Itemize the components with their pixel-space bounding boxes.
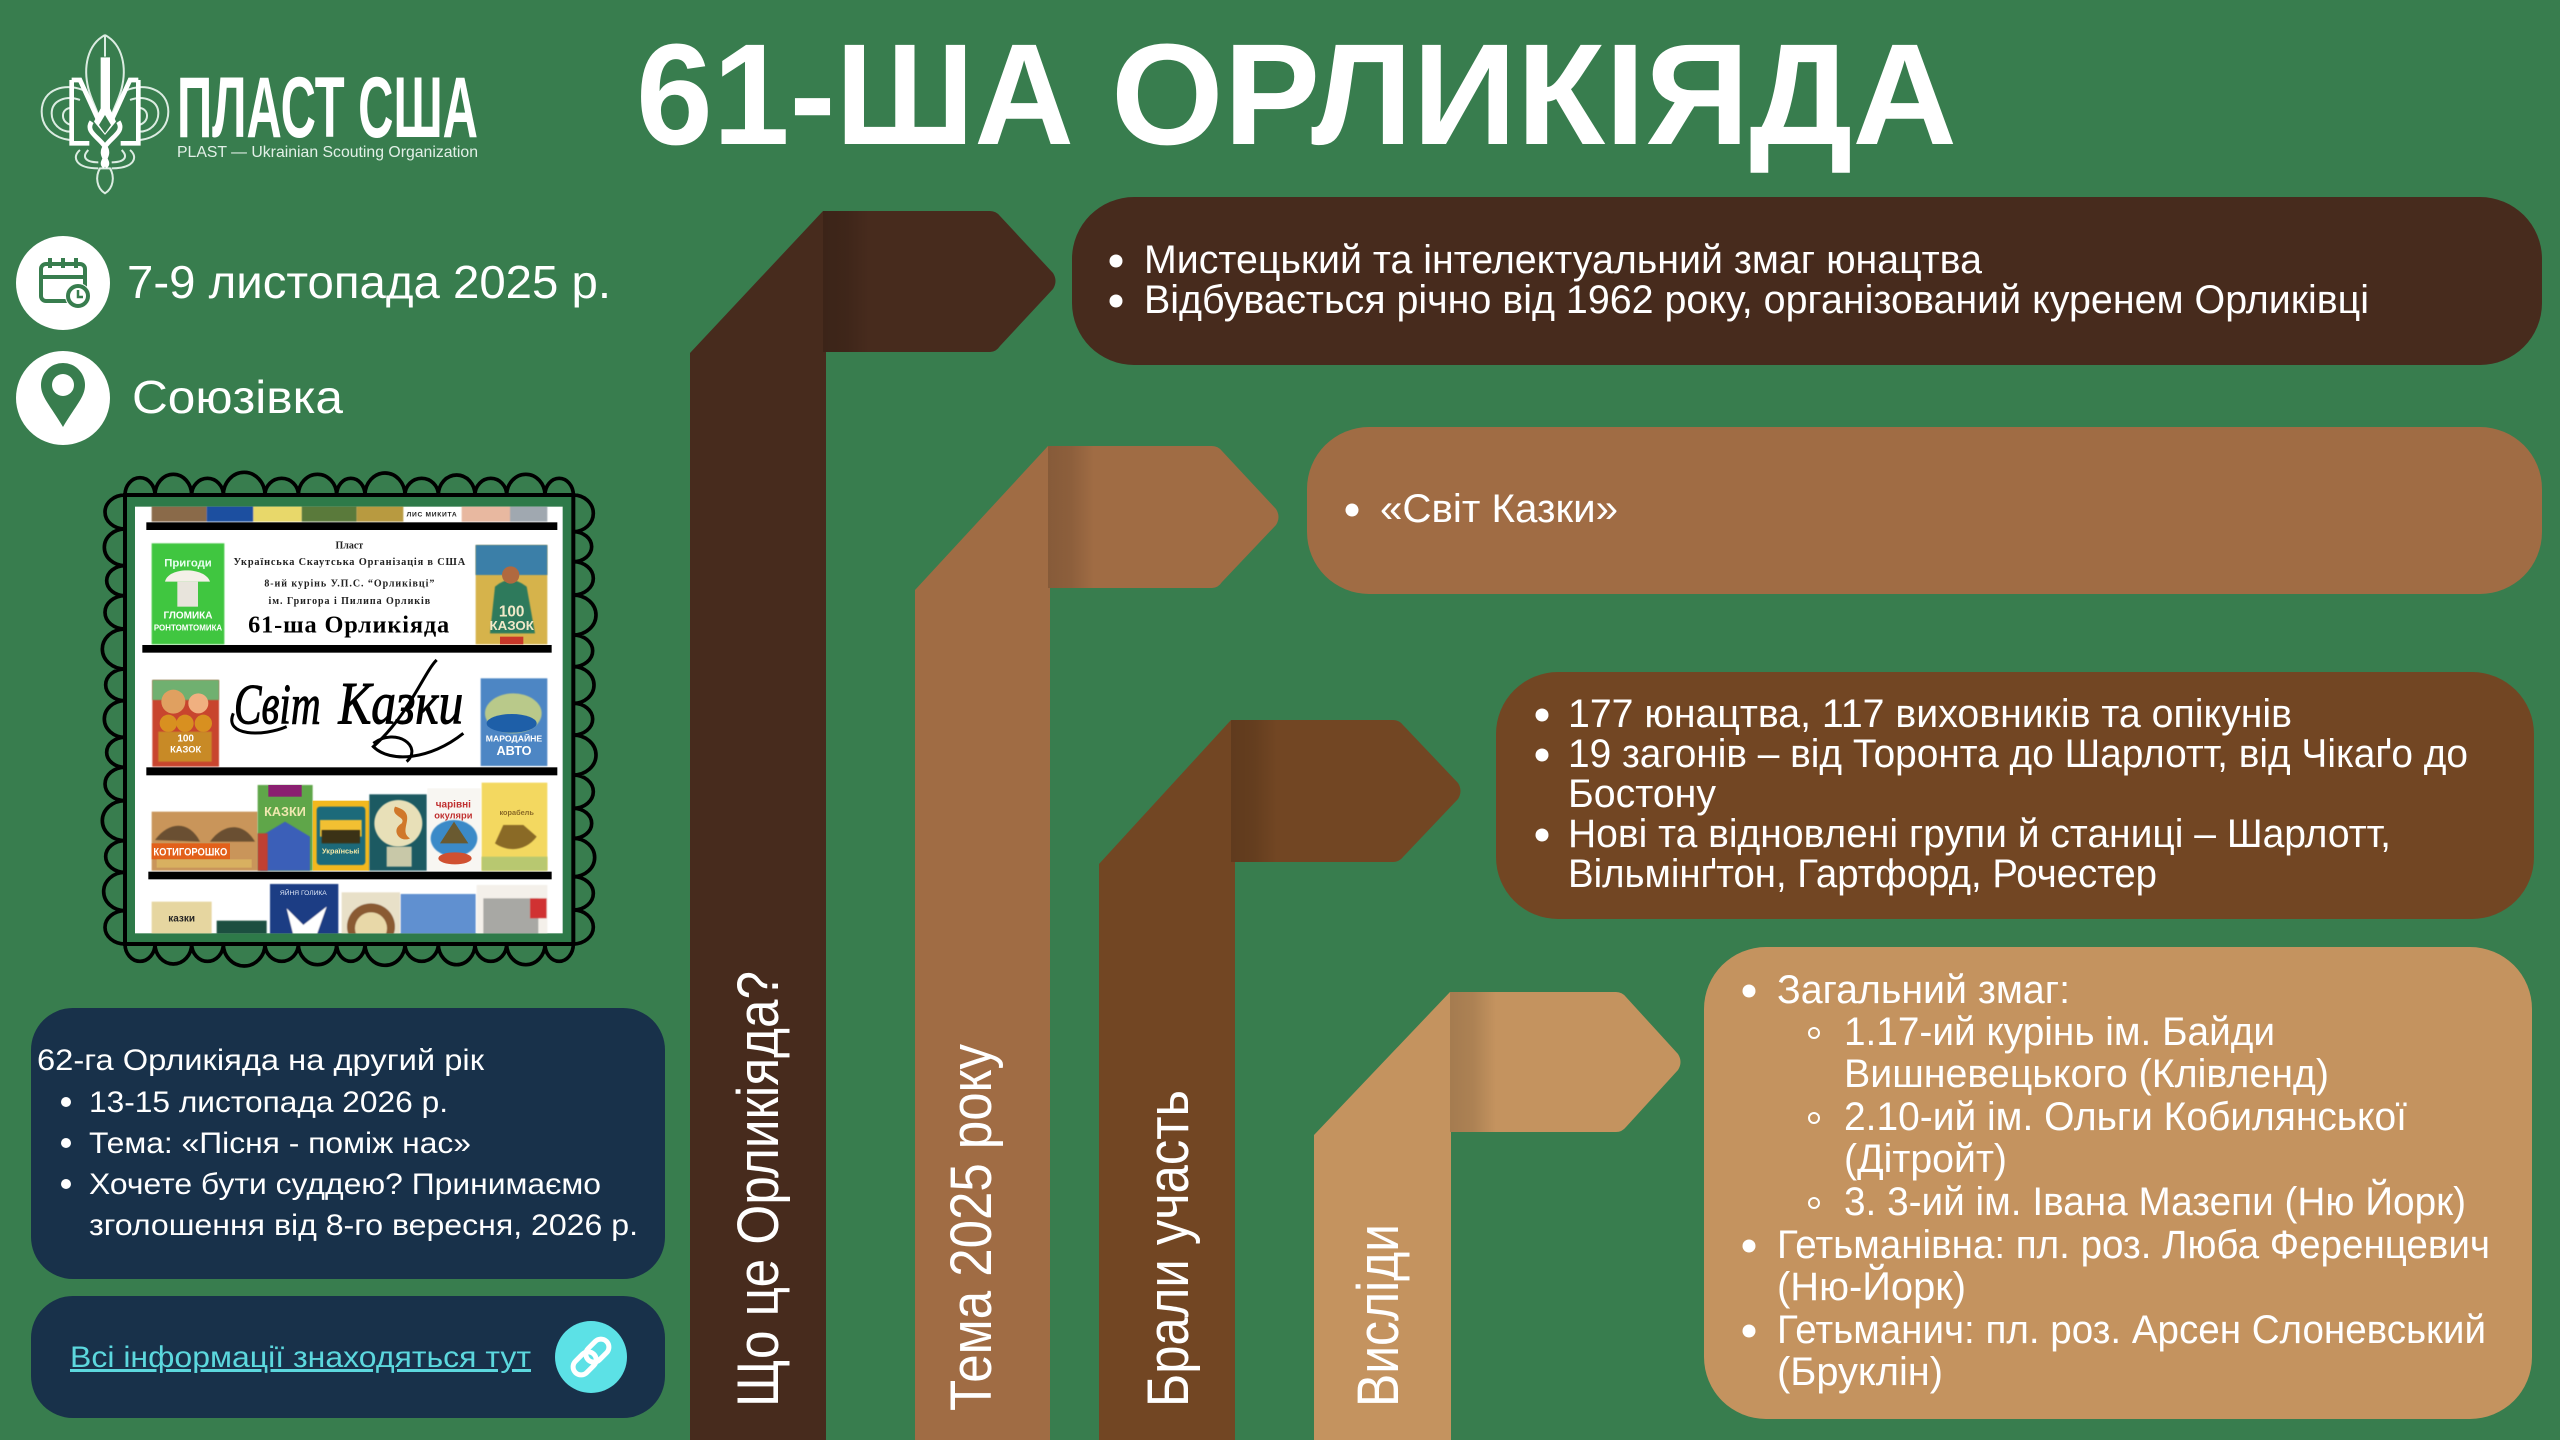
- panel: participants: 19 загонів – від Торонта до Шарлотт, від Чікаґо до: [1568, 732, 2468, 776]
- book: green cover: РОНТОМТОМИКА: [154, 623, 223, 633]
- panel: results: (Ню-Йорк): [1777, 1264, 1966, 1309]
- shelves: [142, 522, 557, 879]
- date row: [16, 236, 611, 330]
- book: magic glasses cover: окуляри: [434, 810, 473, 820]
- panel: results: (Бруклін): [1777, 1350, 1943, 1394]
- next year list: Тема: «Пісня - поміж нас»: [89, 1127, 471, 1160]
- poster script: Svit Kazky: Світ: [234, 674, 321, 736]
- icon: fleur-de-lis with trident: [42, 35, 168, 193]
- logo: Plast USA: [42, 35, 478, 193]
- panel: what is it: [1072, 197, 2542, 365]
- panel: theme: [1307, 427, 2542, 594]
- book: yellow folk tales cover: Українські: [322, 846, 359, 855]
- poster white sheet: [135, 507, 563, 933]
- bottom row of book covers: казки: [168, 914, 195, 925]
- panel: participants: Вільмінґтон, Гартфорд, Рочестер: [1568, 852, 2157, 896]
- book: Kotyhoroshko cover: КОТИГОРОШКО: [153, 846, 227, 858]
- panel: results: [1704, 947, 2532, 1419]
- icon: map pin: [16, 351, 110, 445]
- book: magic car cover: АВТО: [496, 744, 532, 758]
- panel: results: Загальний змаг:: [1777, 968, 2070, 1012]
- poster heading text: 61-ша Орликіяда: [248, 612, 449, 639]
- ribbon: participants: [1099, 720, 1460, 1440]
- title: [636, 14, 1957, 175]
- poster heading text: Українська Скаутська Організація в США: [233, 557, 466, 568]
- ribbon label: Що це Орликіяда?: [726, 971, 791, 1407]
- title: ОРЛИКІЯДА: [1111, 14, 1957, 175]
- panel: results: 3. 3-ий ім. Івана Мазепи (Ню Йорк): [1844, 1179, 2466, 1224]
- next year list: 13-15 листопада 2026 р.: [89, 1086, 448, 1119]
- panel: theme: «Світ Казки»: [1380, 487, 1618, 531]
- panel: participants: Бостону: [1568, 772, 1716, 816]
- book: royal family cover: [152, 680, 219, 767]
- next year list: [61, 1086, 638, 1242]
- scalloped frame: [102, 472, 596, 966]
- panel: what is it: Відбувається річно від 1962 року, організований куренем Орликівці: [1144, 278, 2369, 322]
- book: Kazky green cover: КАЗКИ: [264, 805, 306, 819]
- book: royal family cover: 100: [177, 734, 194, 745]
- ribbon label: Тема 2025 року: [939, 1044, 1004, 1411]
- book: magic glasses cover: чарівні: [436, 799, 471, 810]
- book: teal cover: [369, 794, 427, 871]
- book: 100 tales cover: КАЗОК: [489, 618, 535, 633]
- book: magic car cover: [481, 678, 547, 766]
- icon: chain link: [555, 1321, 627, 1393]
- event poster: [102, 472, 596, 966]
- panel: results: Гетьманівна: пл. роз. Люба Ференцевич: [1777, 1223, 2490, 1267]
- ribbon: results: [1314, 992, 1680, 1440]
- book: green cover: Пригоди: [164, 558, 212, 570]
- poster green mat: [125, 495, 573, 944]
- poster heading text: Пласт: [335, 540, 363, 551]
- book: Kotyhoroshko cover: [152, 812, 258, 871]
- ribbon: theme of 2025: [915, 446, 1278, 1440]
- book: yellow ship cover: [482, 783, 547, 871]
- poster heading text: [233, 540, 466, 639]
- book: yellow folk tales cover: [313, 801, 369, 871]
- poster script: Svit Kazky: Казки: [338, 670, 463, 736]
- poster heading text: ім. Григора і Пилипа Орликів: [268, 596, 431, 607]
- location row: [16, 351, 343, 445]
- panel: what is it: Мистецький та інтелектуальний змаг юнацтва: [1144, 238, 1982, 282]
- book: green cover: [152, 543, 224, 644]
- book: 100 tales cover: 100: [499, 604, 524, 621]
- panel: next Orlykiada: 62-га Орликіяда на другий рік: [37, 1044, 485, 1077]
- icon: calendar with clock: [16, 236, 110, 330]
- book: magic glasses cover: [427, 788, 481, 871]
- panel: next Orlykiada: [31, 1008, 665, 1279]
- panel: results: Вишневецького (Клівленд): [1844, 1052, 2329, 1096]
- panel: results: Гетьманич: пл. роз. Арсен Слоневський: [1777, 1308, 2486, 1352]
- date text: 7-9 листопада 2025 р.: [127, 256, 611, 308]
- bottom row of book covers: [151, 883, 548, 934]
- location text: Союзівка: [132, 371, 343, 423]
- panel: link: [31, 1296, 665, 1418]
- book: royal family cover: КАЗОК: [170, 745, 202, 755]
- top strip of book covers: ЛИС МИКИТА: [407, 512, 457, 519]
- book: green cover: ГЛОМИКА: [164, 610, 212, 621]
- book: magic car cover: МАРОДАЙНЕ: [486, 733, 542, 744]
- ribbon label: Висліди: [1346, 1224, 1411, 1407]
- bottom row of book covers: ЯЙНЯ ГОЛИКА: [280, 888, 327, 897]
- book: yellow ship cover: корабель: [499, 808, 534, 817]
- panel: participants: [1496, 672, 2534, 919]
- panel: participants: 177 юнацтва, 117 виховників та опікунів: [1568, 692, 2292, 736]
- panel: results: (Дітройт): [1844, 1137, 2007, 1181]
- ribbon label: Брали участь: [1136, 1090, 1201, 1407]
- poster script: Svit Kazky: [232, 660, 463, 762]
- panel: results: 1.17-ий курінь ім. Байди: [1844, 1010, 2275, 1054]
- book: Kazky green cover: [258, 785, 313, 871]
- ribbon: what is Orlykiada: [690, 211, 1056, 1440]
- panel: participants: Нові та відновлені групи й станиці – Шарлотт,: [1568, 812, 2391, 856]
- next year list: зголошення від 8-го вересня, 2026 р.: [89, 1209, 638, 1242]
- panel: results: 2.10-ий ім. Ольги Кобилянської: [1844, 1095, 2407, 1139]
- logo tagline: PLAST — Ukrainian Scouting Organization: [177, 144, 478, 161]
- top strip of book covers: [152, 505, 547, 522]
- next year list: Хочете бути суддею? Принимаємо: [89, 1168, 601, 1201]
- link text: Всі інформації знаходяться тут: [70, 1341, 531, 1374]
- book: 100 tales cover: [476, 545, 547, 644]
- logo wordmark: ПЛАСТ США: [177, 60, 478, 156]
- title: 61-ША: [636, 14, 1074, 175]
- poster heading text: 8-ий курінь У.П.С. “Орликівці”: [264, 579, 434, 590]
